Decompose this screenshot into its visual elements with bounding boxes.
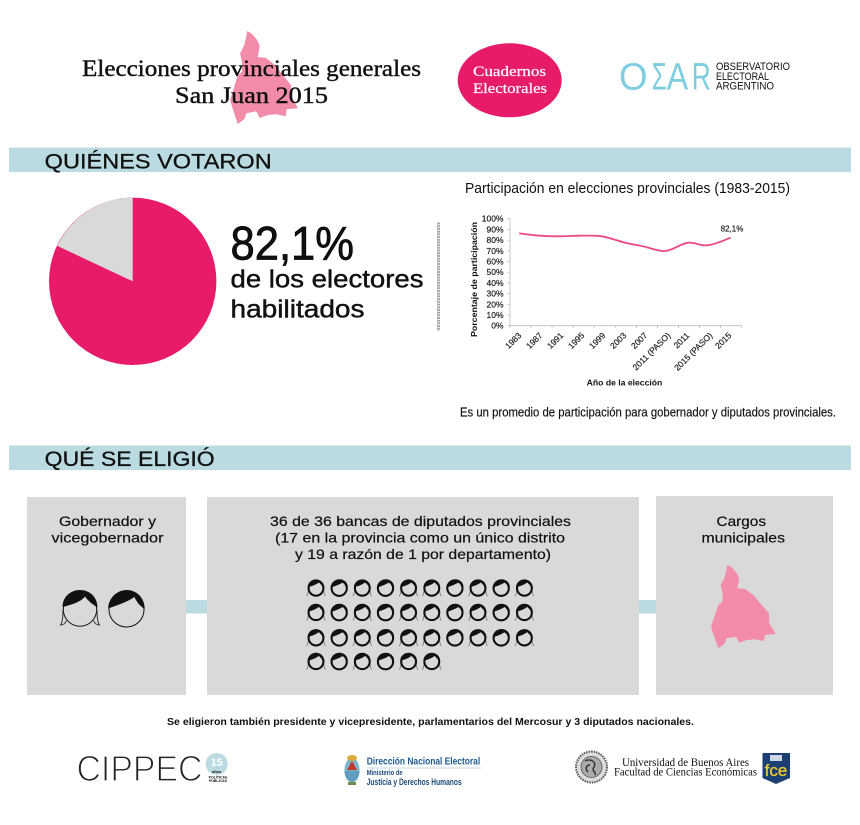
- y axis labels: 100%: [482, 214, 504, 224]
- logo: Dirección Nacional Electoral: [344, 755, 481, 787]
- x axis labels: 1995: [566, 330, 587, 351]
- y axis labels: 50%: [486, 267, 504, 277]
- x axis labels: 2007: [629, 330, 650, 351]
- big figure text: habilitados: [230, 296, 364, 324]
- data line: [519, 233, 731, 251]
- x axis title: Año de la elección: [587, 379, 662, 388]
- panel: governor: [27, 497, 186, 695]
- panel: provincial deputies: y 19 a razón de 1 por departamento): [295, 546, 551, 562]
- section band: Qué se eligió: QUÉ SE ELIGIÓ: [45, 448, 215, 471]
- icon: San Juan map: [711, 565, 776, 648]
- y axis labels: 20%: [486, 299, 504, 309]
- x axis labels: 2003: [608, 330, 629, 351]
- y axis labels: 30%: [486, 289, 504, 299]
- x axis labels: 2011 (PASO): [630, 330, 673, 372]
- icon: fce shield: fce: [765, 761, 787, 780]
- logo: CIPPEC: PÚBLICAS: [209, 778, 228, 783]
- logo: OEAR: OBSERVATORIO: [716, 61, 790, 73]
- y axis labels: [482, 214, 504, 331]
- x axis labels: 2015 (PASO): [672, 330, 715, 373]
- y axis labels: 70%: [486, 246, 504, 256]
- logo: OEAR: A: [667, 56, 689, 98]
- x axis labels: 1991: [545, 330, 566, 351]
- logo: OEAR: [619, 56, 790, 98]
- icon: fce shield: [762, 753, 790, 784]
- logo: OEAR: ARGENTINO: [716, 80, 774, 92]
- logo: OEAR: R: [692, 56, 711, 98]
- logo: OEAR: ELECTORAL: [716, 71, 769, 83]
- panel: municipal offices: municipales: [702, 530, 785, 546]
- x axis labels: 1983: [503, 330, 524, 351]
- x axis labels: 2015: [713, 330, 734, 351]
- badge: Cuadernos Electorales: Electorales: [473, 81, 547, 97]
- x axis labels: 2011: [671, 330, 692, 350]
- y axis labels: 10%: [486, 310, 504, 320]
- logo: Dirección Nacional Electoral: Ministerio de: [367, 770, 403, 777]
- footnote: Se eligieron también presidente y vicepresidente, parlamentarios del Mercosur y 3 diputados nacionales.: [167, 717, 694, 728]
- logo: UBA Facultad de Ciencias Económicas: [576, 752, 790, 784]
- icon: UBA seal: [576, 752, 607, 782]
- big figure text: [230, 216, 424, 324]
- big figure text: de los electores: [230, 265, 424, 293]
- logo: OEAR: Σ: [652, 56, 667, 98]
- logo: CIPPEC: 15: [211, 757, 223, 769]
- section band: Quiénes votaron: QUIÉNES VOTARON: [45, 150, 272, 173]
- logo: CIPPEC: CIPPEC: [76, 748, 202, 789]
- y axis labels: 40%: [486, 278, 504, 288]
- logo: CIPPEC: POLÍTICAS: [209, 774, 228, 780]
- icon grid: 36 seats: [306, 579, 534, 670]
- logo: Dirección Nacional Electoral: Dirección Nacional Electoral: [367, 756, 480, 768]
- x axis labels: [503, 330, 734, 373]
- panel: provincial deputies: (17 en la provincia como un único distrito: [275, 530, 565, 546]
- x axis labels: 1987: [524, 330, 545, 351]
- y axis labels: 60%: [486, 256, 504, 266]
- end value label: 82,1%: [721, 224, 744, 234]
- badge: Cuadernos Electorales: [458, 43, 562, 117]
- x axis labels: 1999: [587, 330, 608, 351]
- badge: Cuadernos Electorales: Cuadernos: [473, 64, 546, 80]
- panel: provincial deputies: [207, 497, 639, 695]
- chart title: Participación en elecciones provinciales (1983-2015): [465, 180, 790, 197]
- icon: man vice-governor: [108, 590, 145, 627]
- icon: coat of arms: [344, 755, 360, 785]
- logo: UBA Facultad de Ciencias Económicas: Facultad de Ciencias Económicas: [614, 766, 757, 778]
- section band: Qué se eligió: [9, 446, 851, 471]
- section band: Quiénes votaron: [9, 148, 851, 173]
- panel: provincial deputies: 36 de 36 bancas de diputados provinciales: [270, 513, 571, 529]
- connector bars: [186, 600, 656, 614]
- panel: governor: Gobernador y: [59, 513, 156, 529]
- panel: municipal offices: [656, 496, 833, 695]
- y axis labels: 90%: [486, 224, 504, 234]
- title: Elecciones provinciales generales: [82, 56, 421, 81]
- logo: UBA Facultad de Ciencias Económicas: Universidad de Buenos Aires: [622, 757, 749, 769]
- title: San Juan 2015: [175, 83, 328, 108]
- header map: San Juan province: [230, 31, 298, 124]
- logo: Dirección Nacional Electoral: Justicia y Derechos Humanos: [367, 777, 462, 787]
- y axis labels: 0%: [491, 321, 504, 331]
- big figure text: 82,1%: [230, 216, 354, 269]
- icon: woman governor: [60, 590, 100, 626]
- pie chart: 82.1%: [49, 198, 216, 365]
- y axis labels: 80%: [486, 235, 504, 245]
- title: [82, 56, 421, 108]
- logo: CIPPEC: años: [212, 769, 222, 774]
- line chart: participation 1983-2015: [470, 214, 744, 388]
- panel: governor: vicegobernador: [52, 530, 164, 546]
- y axis title: Porcentaje de participación: [470, 222, 479, 337]
- panel: municipal offices: Cargos: [716, 513, 766, 529]
- logo: OEAR: O: [619, 56, 648, 98]
